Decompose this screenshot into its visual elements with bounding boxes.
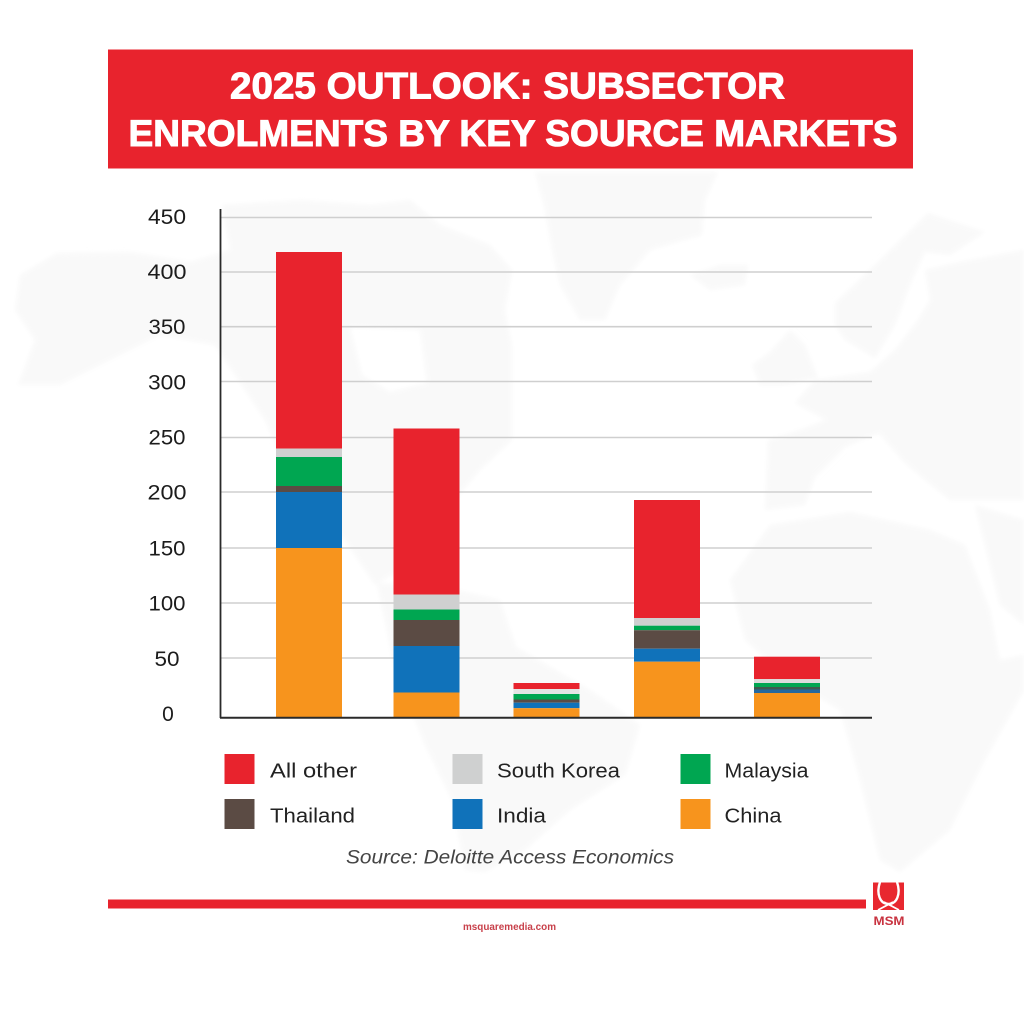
legend: All other: All other	[270, 760, 357, 782]
y axis labels: 100	[148, 592, 186, 616]
bar 3	[514, 683, 580, 718]
y axis labels: 150	[148, 538, 186, 560]
logo: MSM: MSM	[874, 914, 904, 928]
title line 1: 2025 OUTLOOK: SUBSECTOR	[230, 66, 785, 106]
footer rule	[108, 900, 866, 908]
legend: India	[452, 799, 547, 829]
stacked bar chart	[148, 206, 872, 726]
legend: Thailand: Thailand	[270, 804, 355, 828]
bar 1	[276, 252, 342, 718]
y axis labels: 300	[148, 372, 186, 394]
logo: MSM	[873, 882, 904, 928]
source note: Source: Deloitte Access Economics	[346, 848, 675, 868]
bar 5	[754, 657, 820, 718]
bar 2	[394, 428, 460, 718]
y axis labels: 250	[148, 426, 186, 450]
legend: China	[680, 799, 782, 829]
background: faint world map	[15, 172, 1024, 872]
website url: msquaremedia.com	[463, 921, 556, 933]
legend: China: China	[724, 804, 782, 828]
title banner	[108, 50, 913, 168]
legend	[224, 754, 809, 829]
legend: India: India	[497, 804, 547, 828]
y axis labels: 400	[148, 261, 186, 284]
y axis labels: 50	[154, 648, 180, 671]
y axis labels: 450	[148, 206, 186, 229]
title line 2: ENROLMENTS BY KEY SOURCE MARKETS	[128, 113, 898, 154]
y axis labels: 200	[148, 482, 186, 504]
legend: Thailand	[224, 799, 355, 829]
legend: All other	[224, 754, 357, 784]
legend: Malaysia	[680, 754, 809, 784]
y axis labels: 0	[162, 703, 174, 726]
legend: Malaysia: Malaysia	[724, 760, 809, 782]
bar 4	[634, 500, 700, 718]
legend: South Korea: South Korea	[497, 760, 621, 782]
y axis labels	[148, 206, 186, 726]
y axis labels: 350	[148, 316, 186, 339]
axes	[220, 209, 872, 718]
legend: South Korea	[452, 754, 621, 784]
